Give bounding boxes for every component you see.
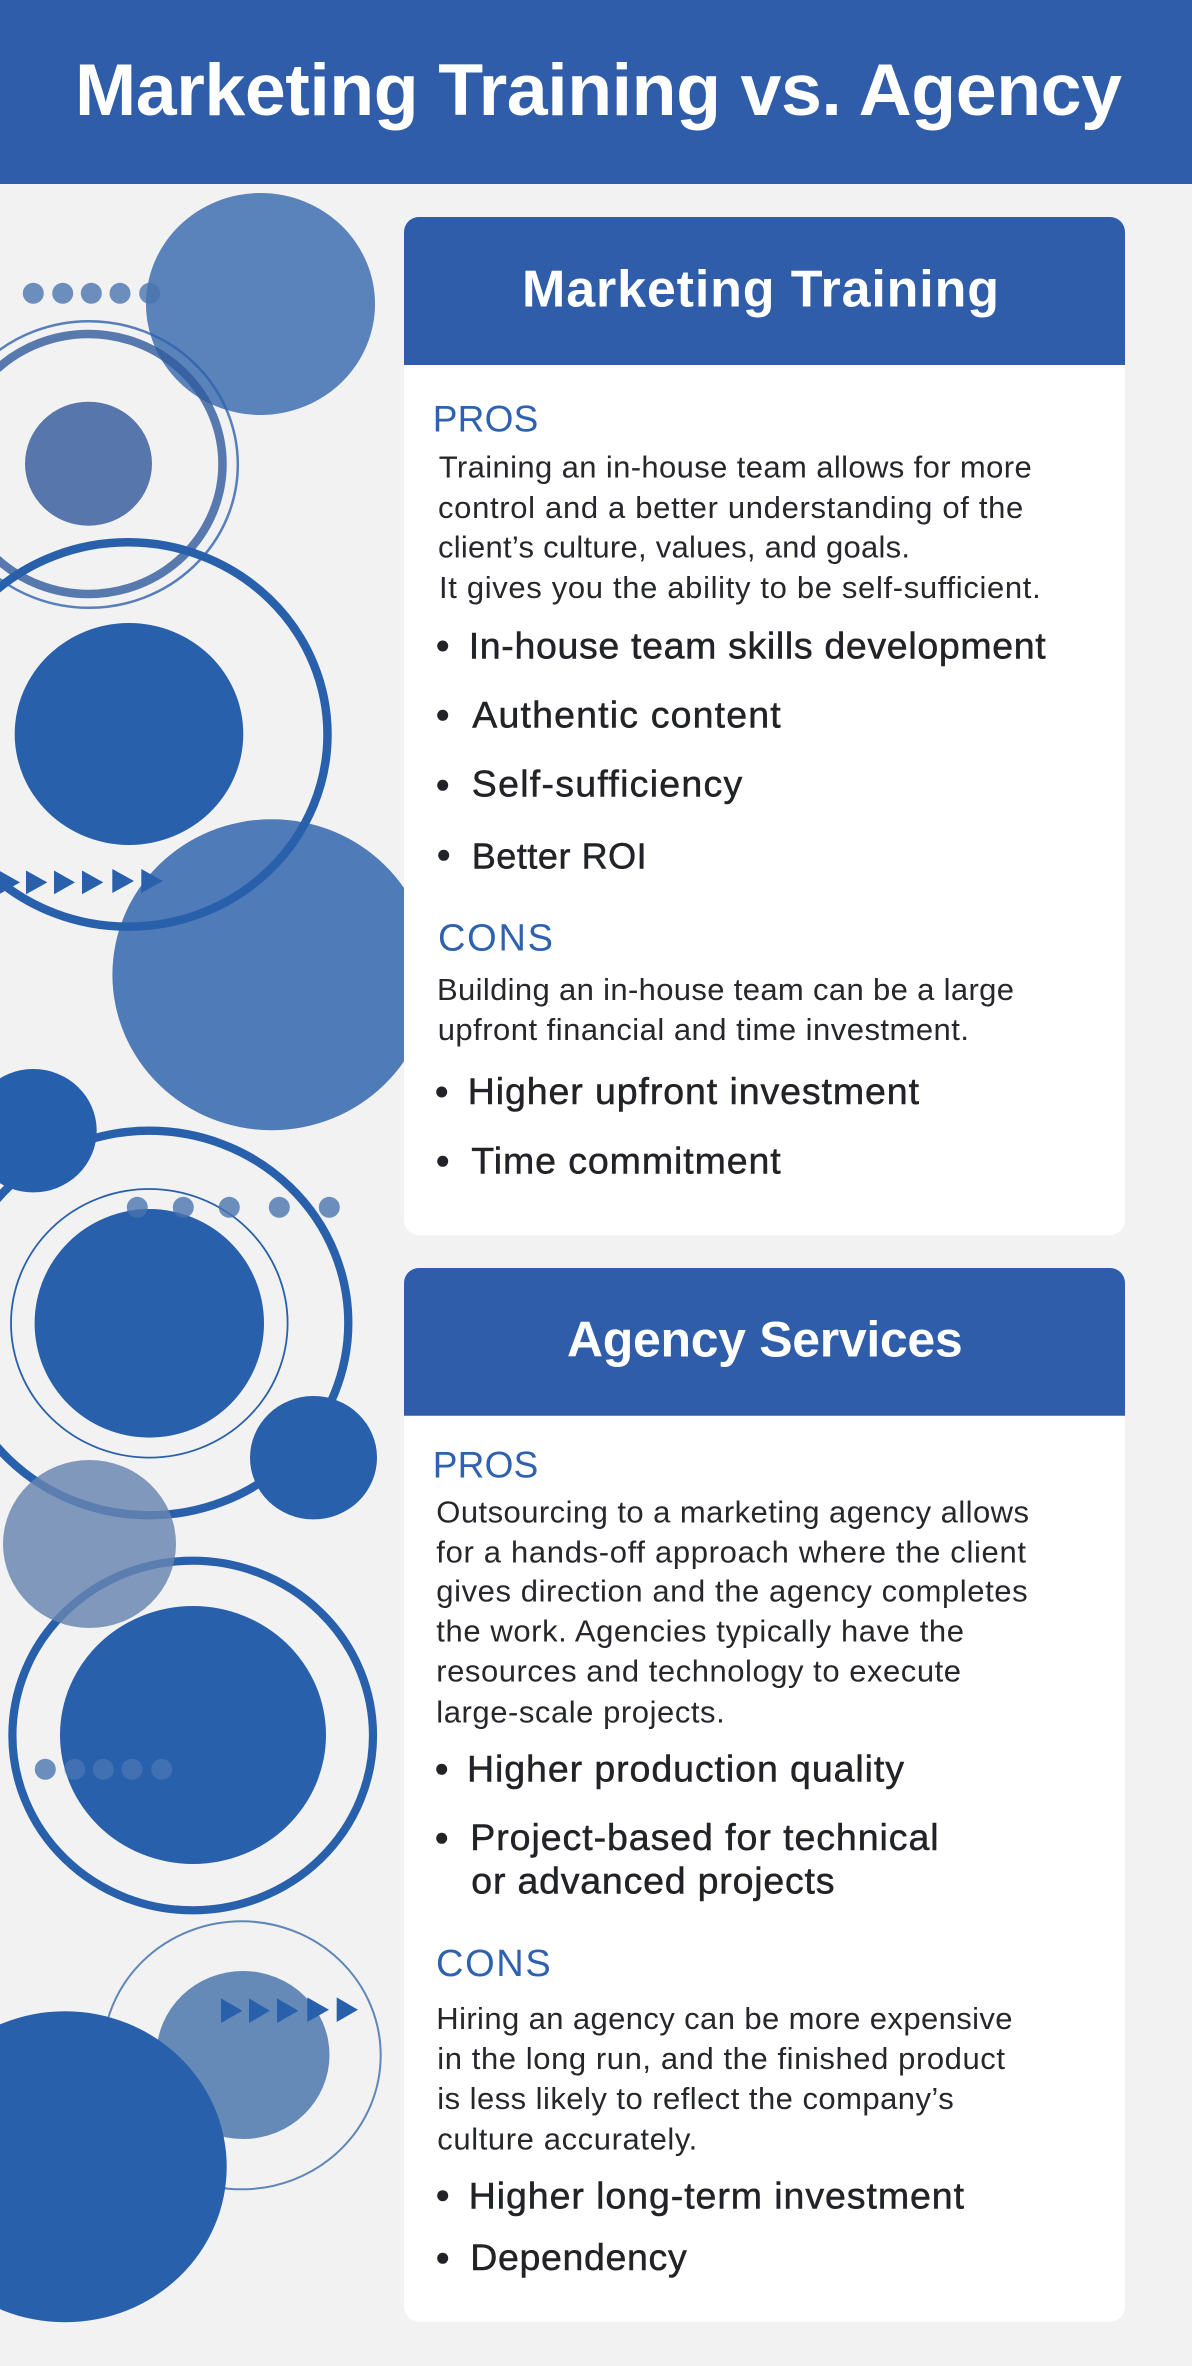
panel header: marketing training	[404, 217, 1125, 365]
text block: pros description: gives direction and the agency completes	[436, 1574, 1028, 1609]
list: pros bullets	[436, 1748, 939, 1901]
list: pros bullets: Better ROI	[472, 836, 647, 877]
list: pros bullets: or advanced projects	[471, 1859, 834, 1901]
text block: pros description	[438, 450, 1041, 605]
text block: cons description: Hiring an agency can be more expensive	[436, 2001, 1012, 2036]
dot row 3	[35, 1759, 172, 1780]
dark circle right	[250, 1396, 377, 1519]
text block: pros description: Training an in-house team allows for more	[439, 450, 1032, 485]
big dark circle bottom	[0, 2011, 227, 2322]
decorative circles column	[0, 193, 431, 2322]
arrow row 1	[0, 869, 163, 894]
text block: cons description: Building an in-house team can be a large	[437, 972, 1014, 1007]
text block: pros description	[436, 1495, 1029, 1729]
list: pros bullets: Authentic content	[472, 693, 781, 735]
dot row 1	[23, 283, 160, 304]
text block: cons description: culture accurately.	[437, 2121, 697, 2156]
list: cons bullets: Higher upfront investment	[468, 1070, 920, 1112]
ring 4 with solid circle	[12, 1561, 373, 1910]
text block: pros description: It gives you the ability to be self-sufficient.	[439, 570, 1041, 605]
list: pros bullets: In-house team skills development	[469, 624, 1046, 666]
list: cons bullets: Higher long-term investment	[469, 2174, 965, 2216]
heading: pros: PROS	[433, 399, 538, 440]
text block: cons description	[436, 2001, 1012, 2156]
panel: marketing training	[404, 217, 1125, 1235]
list: pros bullets: Self-sufficiency	[472, 763, 743, 805]
text block: pros description: control and a better understanding of the	[438, 490, 1023, 525]
heading: cons: CONS	[438, 918, 553, 960]
text block: pros description: the work. Agencies typically have the	[436, 1614, 964, 1649]
panel header: marketing training: Marketing Training	[522, 261, 999, 319]
list: pros bullets: Project-based for technical	[470, 1816, 939, 1858]
text block: pros description: client’s culture, values, and goals.	[438, 530, 910, 565]
heading: pros: PROS	[433, 1444, 538, 1485]
dot row 2	[127, 1197, 340, 1218]
text block: pros description: large-scale projects.	[436, 1694, 725, 1729]
panel header: agency services	[404, 1268, 1125, 1416]
ring 2 with solid circle	[0, 542, 328, 927]
text block: cons description	[437, 972, 1014, 1047]
double ring with inner circle	[0, 321, 238, 608]
text block: pros description: for a hands-off approach where the client	[436, 1534, 1026, 1569]
text block: cons description: upfront financial and time investment.	[438, 1012, 969, 1047]
list: cons bullets	[437, 2174, 965, 2278]
light circle top	[146, 193, 375, 415]
ring 3 with thin ring and solid circle	[0, 1131, 348, 1515]
text block: pros description: Outsourcing to a marketing agency allows	[436, 1495, 1029, 1530]
arrow row 2	[221, 1997, 358, 2023]
heading: cons: CONS	[436, 1943, 551, 1985]
title: Marketing Training vs. Agency	[75, 48, 1122, 131]
panel header: agency services: Agency Services	[567, 1312, 963, 1368]
list: pros bullets: Higher production quality	[467, 1748, 904, 1790]
list: cons bullets: Dependency	[470, 2236, 687, 2278]
list: cons bullets	[436, 1070, 920, 1181]
list: pros bullets	[437, 624, 1046, 877]
dark circle left	[0, 1069, 97, 1192]
list: cons bullets: Time commitment	[471, 1139, 781, 1181]
large light circle	[112, 819, 431, 1130]
text block: cons description: is less likely to reflect the company’s	[437, 2081, 954, 2116]
text block: cons description: in the long run, and the finished product	[437, 2041, 1005, 2076]
title banner	[0, 0, 1192, 184]
grey-blue circle	[3, 1460, 176, 1628]
panel: agency services	[404, 1268, 1125, 2322]
thin ring 5 with medium circle	[103, 1921, 381, 2189]
text block: pros description: resources and technology to execute	[436, 1654, 961, 1689]
